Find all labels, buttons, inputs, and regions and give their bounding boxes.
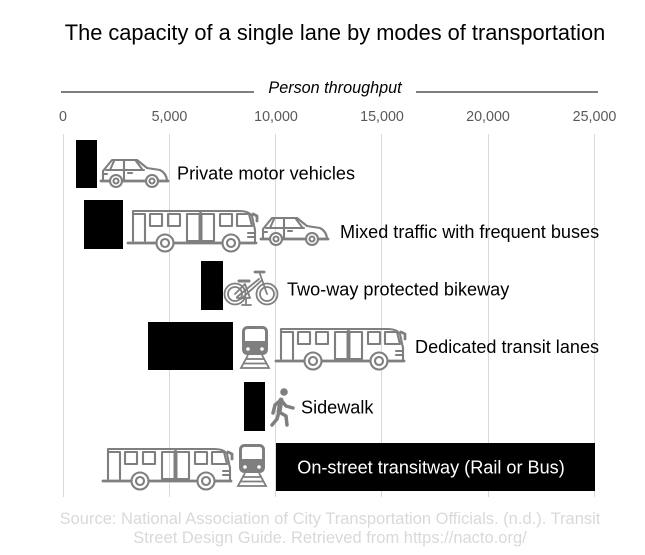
bar [76,140,97,188]
row: mixed traffic [84,200,599,252]
row: private motor vehicles [76,140,355,188]
bar [148,322,233,370]
axis tick labels: 25,000 [573,109,616,125]
icon: bus [276,329,405,370]
source note: Source: National Association of City Transportation Officials. (n.d.). Transit [60,510,601,528]
title: The capacity of a single lane by modes of transportation [65,20,605,45]
axis tick labels: 10,000 [254,109,298,125]
icon: pedestrian [272,388,293,425]
label: Mixed traffic with frequent buses [340,222,599,242]
source note [60,510,601,547]
axis tick labels [59,109,616,125]
axis tick labels: 20,000 [466,109,510,125]
label: Two-way protected bikeway [287,280,510,300]
axis title: Person throughput [268,79,403,97]
axis tick labels: 0 [59,109,67,125]
label: Dedicated transit lanes [415,337,599,357]
row: protected bikeway [201,261,510,310]
icon: train [241,328,269,368]
icon: bicycle [224,272,278,305]
label: On-street transitway (Rail or Bus) [297,458,565,478]
icon: train [238,446,266,486]
bar [276,443,595,491]
label: Sidewalk [301,398,374,418]
label: Private motor vehicles [177,164,355,184]
row: sidewalk [244,382,374,431]
bar [84,200,123,249]
source note: Street Design Guide. Retrieved from https://nacto.org/ [133,529,527,547]
icon: bus [103,449,232,490]
row: dedicated transit lanes [148,322,599,370]
icon: car [101,160,168,187]
icon: bus [128,211,257,252]
row: on-street transitway [103,443,595,491]
axis tick labels: 5,000 [152,109,187,125]
axis tick labels: 15,000 [360,109,404,125]
icon: car [261,218,328,245]
bar [201,261,223,310]
bar [244,382,265,431]
